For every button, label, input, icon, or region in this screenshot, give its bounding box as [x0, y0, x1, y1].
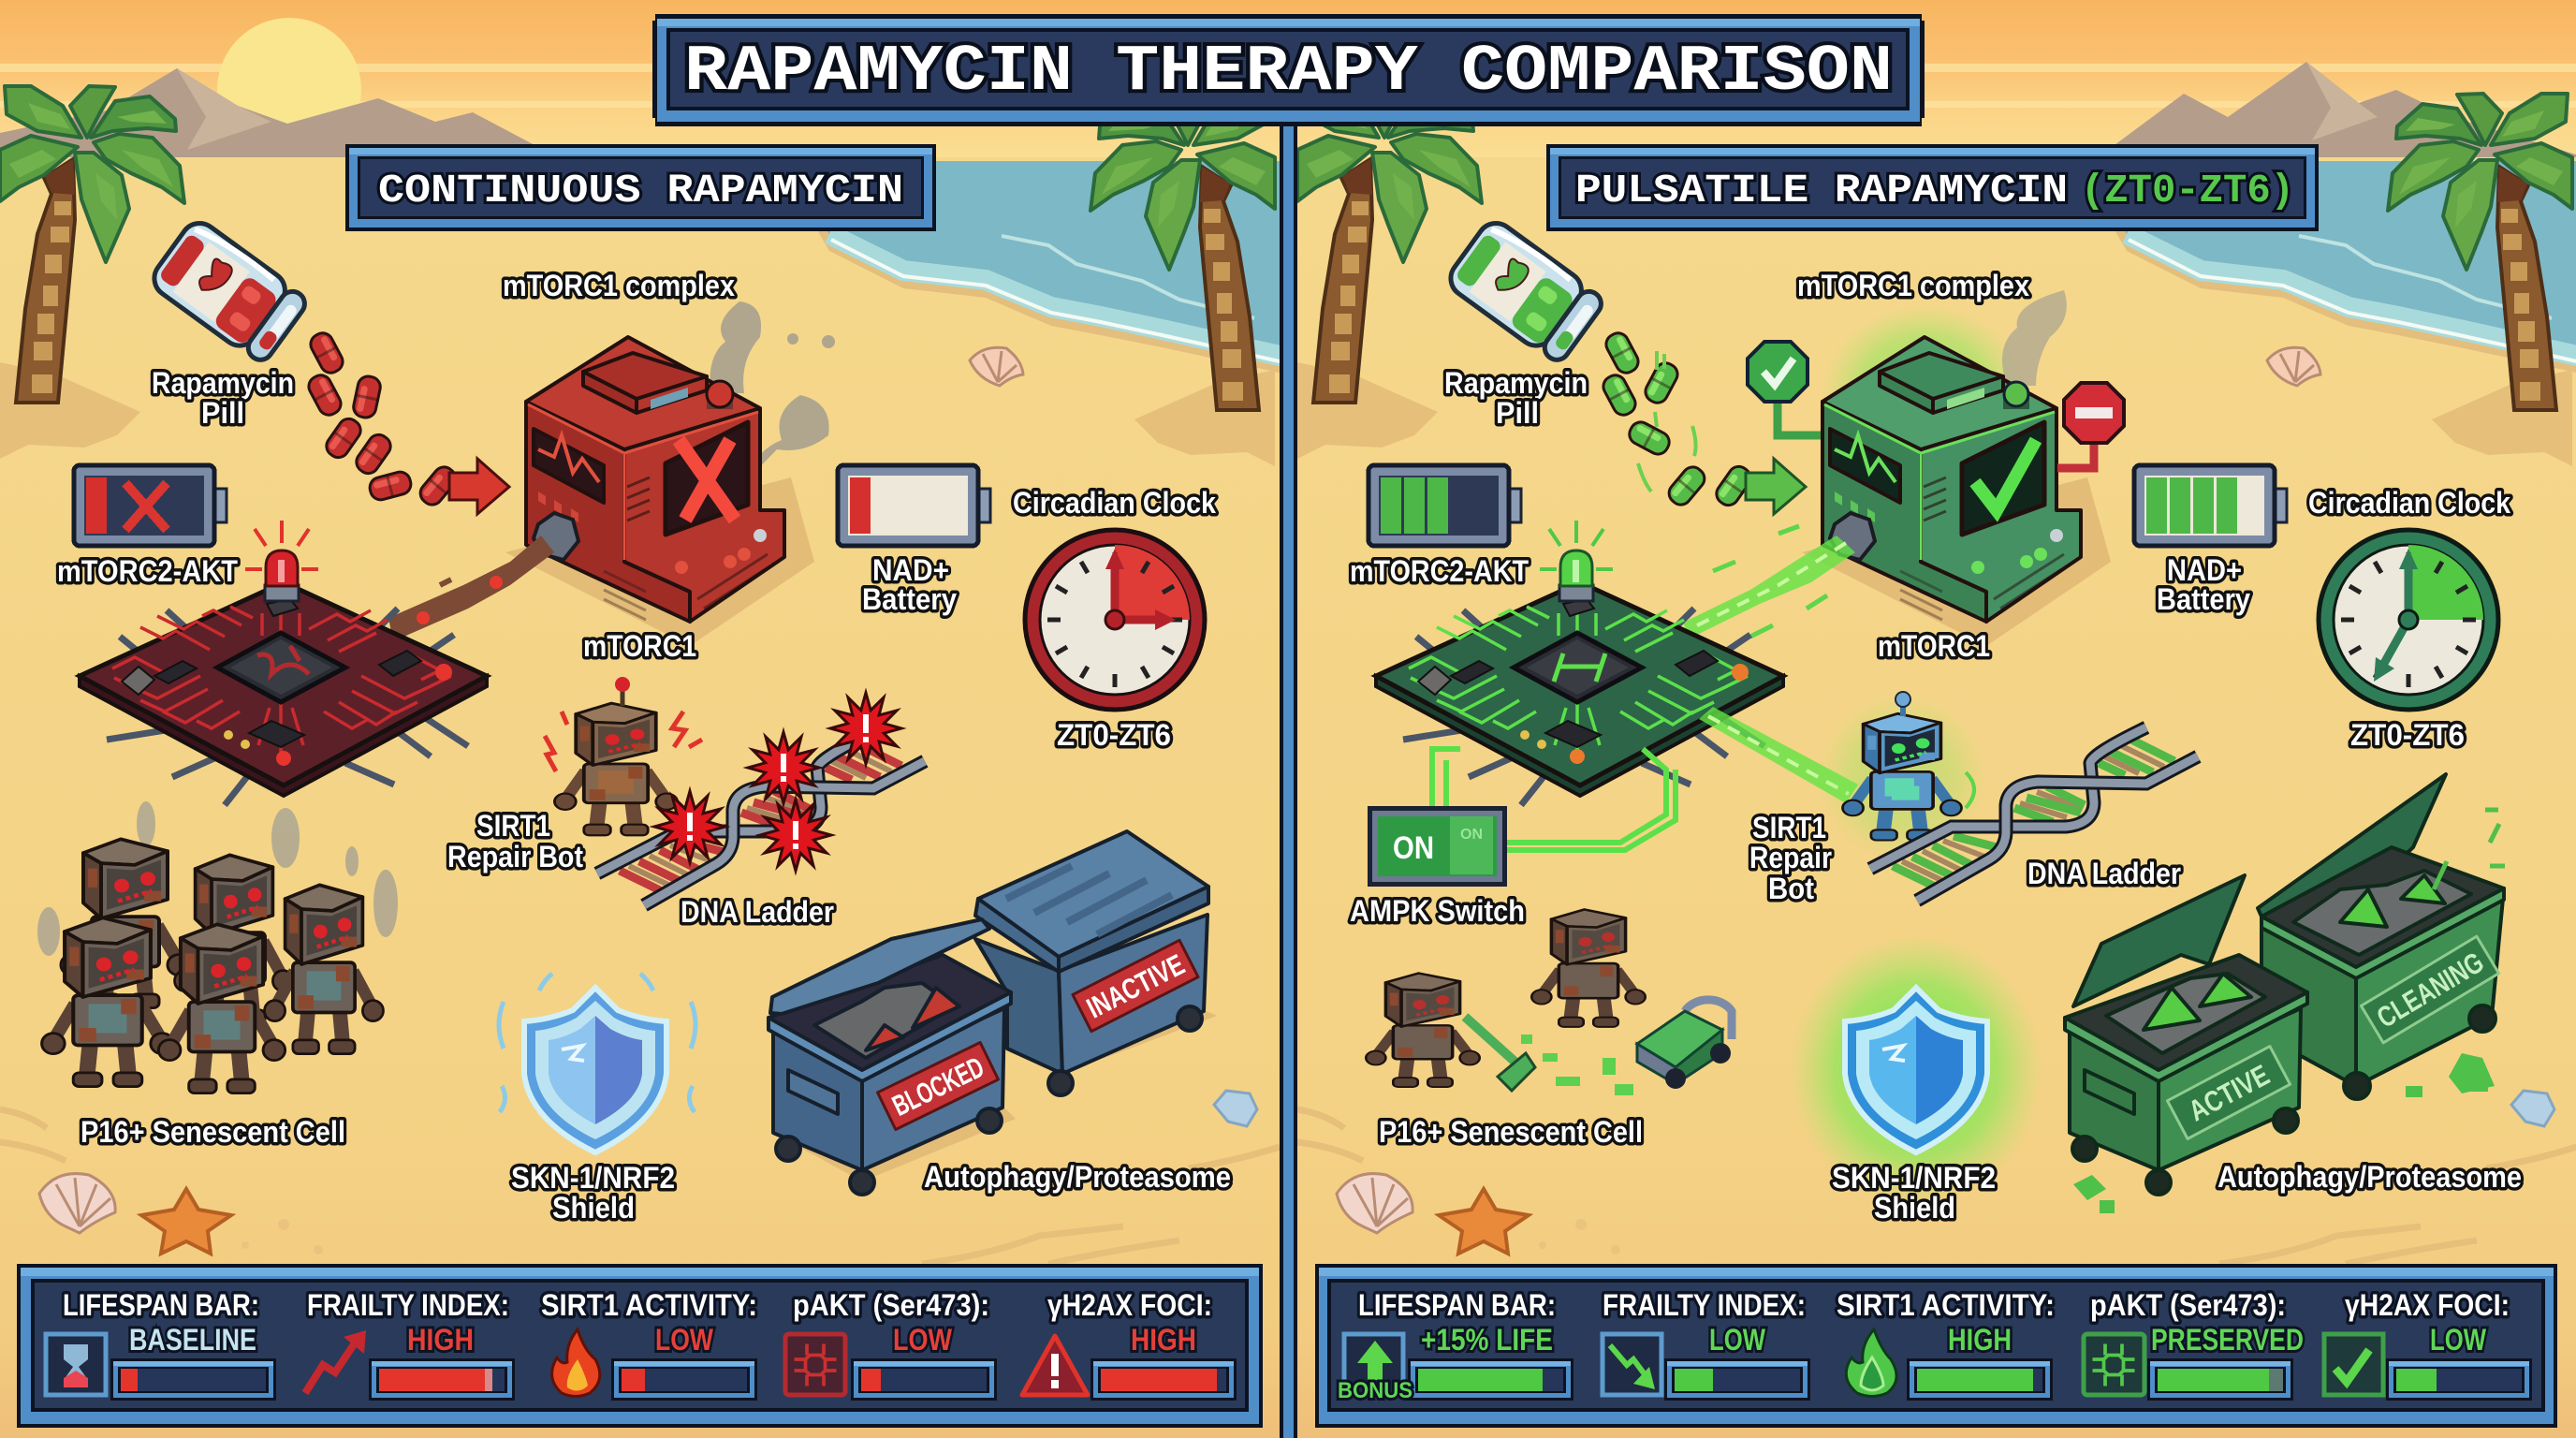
- stat: frailty: HIGH: [407, 1323, 474, 1357]
- stat: pakt: pAKT (Ser473):: [793, 1288, 989, 1322]
- stat: gamma h2ax: LOW: [2430, 1323, 2487, 1357]
- sign: allowed: [1748, 342, 1821, 435]
- stat: frailty: [1603, 1288, 1810, 1401]
- falling pills: [1600, 330, 1754, 509]
- label: mtorc2-akt: mTORC2-AKT: [57, 554, 238, 588]
- label: mtorc1: mTORC1: [583, 629, 696, 663]
- label: dna ladder: DNA Ladder: [681, 895, 834, 929]
- machine: mtorc1 failing: [505, 337, 814, 646]
- active signal beam: [1683, 526, 1855, 638]
- label: nad+ battery: NAD+: [2167, 553, 2242, 587]
- panel: continuous rapamycin: [17, 144, 1263, 1428]
- stat: gamma h2ax: HIGH: [1131, 1323, 1196, 1357]
- senescent robots being cleared: [1366, 909, 1732, 1095]
- clock: zt0-zt6: [1025, 530, 1205, 710]
- stat: pakt: [2084, 1288, 2304, 1401]
- dna ladder damaged: [597, 732, 925, 905]
- label: dna ladder: DNA Ladder: [2027, 857, 2181, 890]
- stat: gamma h2ax: γH2AX FOCI:: [1047, 1288, 1212, 1322]
- stat: sirt1: [1837, 1288, 2055, 1401]
- status panel: continuous: [17, 1264, 1263, 1428]
- stat: pakt: [785, 1288, 997, 1401]
- label: nad+ battery: [862, 553, 957, 616]
- label: rapamycin pill: [1444, 366, 1588, 430]
- label: mtorc2-akt: mTORC2-AKT: [1350, 554, 1529, 588]
- arrow to mtorc1: [449, 459, 509, 514]
- dumpster: active: [2065, 875, 2307, 1195]
- tag: blocked: [878, 1042, 998, 1130]
- icon: falling arrow: [1603, 1334, 1661, 1395]
- stat: lifespan: [46, 1288, 276, 1401]
- broken signal beam: [388, 536, 554, 641]
- label: sirt1 repair bot: Bot: [1768, 872, 1814, 905]
- circuit board: [1376, 582, 1783, 805]
- battery: mtorc2-akt: [74, 465, 227, 546]
- heading: pulsatile: PULSATILE RAPAMYCIN: [1575, 168, 2068, 213]
- spilled green waste: [2073, 810, 2505, 1213]
- label: p16+ senescent cell: P16+ Senescent Cell: [1379, 1115, 1643, 1149]
- green debris: [1521, 1034, 1633, 1095]
- stat: gamma h2ax: γH2AX FOCI:: [2345, 1288, 2510, 1322]
- label: rapamycin pill: Pill: [1496, 396, 1539, 430]
- label: autophagy/proteasome: Autophagy/Proteasome: [2217, 1160, 2522, 1194]
- smoke: [2002, 290, 2067, 386]
- icon: chip: [2084, 1334, 2144, 1395]
- icon: bonus arrow: BONUS: [1338, 1378, 1412, 1403]
- beam to repair bot: [1699, 707, 1858, 803]
- label: sirt1 repair bot: SIRT1: [1752, 811, 1826, 844]
- siren: red alert: [245, 521, 318, 601]
- stat: sirt1: [541, 1288, 757, 1401]
- glow behind machine: [1822, 304, 2027, 482]
- label: rapamycin pill: Pill: [201, 396, 244, 430]
- stat: frailty: FRAILTY INDEX:: [1603, 1288, 1806, 1322]
- robot: sirt1 repair bot damaged: [545, 677, 702, 835]
- sign: blocked: [2057, 383, 2124, 468]
- icon: pill bottle: [1443, 216, 1607, 366]
- label: skn-1/nrf2 shield: [1832, 1161, 1996, 1225]
- label: mtorc1 complex: mTORC1 complex: [1797, 269, 2029, 302]
- stat: sirt1: SIRT1 ACTIVITY:: [1837, 1288, 2055, 1322]
- label: sirt1 repair bot: [1749, 811, 1832, 905]
- label: sirt1 repair bot: Repair Bot: [447, 840, 583, 873]
- icon: flame: [552, 1329, 600, 1397]
- switch: ampk on: ON: [1393, 830, 1434, 866]
- stat: lifespan: LIFESPAN BAR:: [63, 1288, 259, 1322]
- damage markers: [654, 693, 901, 871]
- divider between panels: [1280, 122, 1297, 1438]
- icon: warning: [1022, 1336, 1088, 1395]
- label: zt0-zt6: ZT0-ZT6: [1057, 718, 1171, 752]
- title: [652, 14, 1925, 126]
- senescent robots: [37, 801, 398, 1093]
- robot: sirt1 repair bot healthy: [1818, 692, 1986, 861]
- label: rapamycin pill: Rapamycin: [152, 366, 294, 400]
- stat: frailty: LOW: [1709, 1323, 1766, 1357]
- glow behind shield: [1790, 934, 2042, 1206]
- icon: hourglass: [46, 1334, 106, 1395]
- label: p16+ senescent cell: P16+ Senescent Cell: [80, 1115, 345, 1149]
- siren: green: [1540, 521, 1613, 601]
- stat: lifespan: LIFESPAN BAR:: [1358, 1288, 1556, 1322]
- tag: blocked: BLOCKED: [887, 1050, 989, 1123]
- label: circadian clock: Circadian Clock: [1013, 486, 1216, 520]
- stat: sirt1: LOW: [655, 1323, 714, 1357]
- stat: lifespan: +15% LIFE: [1421, 1323, 1553, 1357]
- stat: frailty: [305, 1288, 515, 1401]
- icon: bonus arrow: [1338, 1334, 1412, 1403]
- shield: skn-1/nrf2: [499, 974, 695, 1152]
- stat: pakt: LOW: [893, 1323, 953, 1357]
- stat: sirt1: SIRT1 ACTIVITY:: [541, 1288, 757, 1322]
- icon: rising arrow: [305, 1330, 366, 1393]
- title: RAPAMYCIN THERAPY COMPARISON: [684, 36, 1893, 110]
- stat: lifespan: BASELINE: [129, 1323, 256, 1357]
- icon: chip: [785, 1334, 845, 1395]
- battery: mtorc2-akt: [1368, 465, 1521, 546]
- label: autophagy/proteasome: Autophagy/Proteasome: [924, 1160, 1231, 1194]
- clock: zt0-zt6: [2319, 530, 2498, 710]
- label: skn-1/nrf2 shield: Shield: [552, 1191, 635, 1225]
- label: nad+ battery: NAD+: [872, 553, 949, 587]
- battery: nad+: [2134, 465, 2287, 546]
- smoke puffs: [37, 801, 398, 956]
- screen check: [1975, 440, 2036, 510]
- stat: pakt: pAKT (Ser473):: [2090, 1288, 2286, 1322]
- tag: cleaning: CLEANING: [2371, 946, 2489, 1034]
- shield: skn-1/nrf2: [1845, 988, 1987, 1152]
- icon: check box: [2324, 1334, 2383, 1395]
- traces to ampk switch: [1432, 749, 1676, 850]
- robot mower: [1637, 1000, 1732, 1089]
- screen x: [679, 440, 735, 520]
- label: sirt1 repair bot: SIRT1: [476, 809, 550, 843]
- heading: pulsatile: [1546, 144, 2319, 231]
- heading: pulsatile: (ZT0-ZT6): [2081, 168, 2294, 213]
- stat: frailty: FRAILTY INDEX:: [307, 1288, 509, 1322]
- alarm light: [707, 381, 733, 409]
- tag: inactive: INACTIVE: [1081, 947, 1190, 1024]
- stat: lifespan: [1338, 1288, 1573, 1403]
- dumpster: cleaning: [2258, 774, 2504, 1099]
- dumpster: blocked: [768, 919, 1016, 1195]
- dna ladder healthy: [1870, 727, 2198, 901]
- label: zt0-zt6: ZT0-ZT6: [2350, 718, 2465, 752]
- switch: ampk on: [1368, 806, 1507, 887]
- label: skn-1/nrf2 shield: Shield: [1874, 1191, 1955, 1225]
- stat: sirt1: HIGH: [1948, 1323, 2012, 1357]
- label: mtorc1 complex: mTORC1 complex: [503, 269, 735, 302]
- label: nad+ battery: Battery: [862, 582, 957, 616]
- board leds: [276, 664, 452, 766]
- label: nad+ battery: [2157, 553, 2250, 616]
- label: skn-1/nrf2 shield: [511, 1161, 675, 1225]
- stat: gamma h2ax: [2324, 1288, 2532, 1401]
- machine: mtorc1 active: [1802, 337, 2111, 646]
- label: rapamycin pill: Rapamycin: [1444, 366, 1588, 400]
- tag: active: ACTIVE: [2183, 1058, 2275, 1127]
- chip glyph: [1554, 653, 1605, 682]
- label: skn-1/nrf2 shield: SKN-1/NRF2: [511, 1161, 675, 1195]
- label: skn-1/nrf2 shield: SKN-1/NRF2: [1832, 1161, 1996, 1195]
- label: circadian clock: Circadian Clock: [2308, 486, 2510, 520]
- label: sirt1 repair bot: Repair: [1749, 841, 1832, 874]
- stat: pakt: PRESERVED: [2151, 1323, 2304, 1357]
- label: sirt1 repair bot: [447, 809, 583, 873]
- board led: [1570, 664, 1749, 764]
- status light: [2003, 382, 2029, 409]
- label: rapamycin pill: [152, 366, 294, 430]
- label: ampk switch: AMPK Switch: [1350, 894, 1525, 928]
- status panel: pulsatile: [1315, 1264, 2557, 1428]
- vacuum: [1465, 1017, 1535, 1091]
- heading: continuous: CONTINUOUS RAPAMYCIN: [378, 168, 903, 213]
- smoke: [710, 301, 835, 479]
- label: mtorc1: mTORC1: [1878, 629, 1990, 663]
- label: nad+ battery: Battery: [2157, 582, 2250, 616]
- panel: pulsatile rapamycin: [1315, 144, 2557, 1428]
- battery: nad+: [838, 465, 990, 546]
- icon: green flame: [1846, 1329, 1896, 1397]
- stat: gamma h2ax: [1022, 1288, 1237, 1401]
- chip crack: [257, 646, 309, 674]
- icon: pill bottle: [147, 216, 311, 366]
- dumpster: inactive: [975, 831, 1217, 1095]
- arrow to mtorc1: [1746, 459, 1806, 514]
- heading: continuous: [345, 144, 936, 231]
- circuit board: [80, 582, 487, 805]
- falling pills: [305, 330, 460, 509]
- switch: ampk on: ON: [1460, 827, 1483, 843]
